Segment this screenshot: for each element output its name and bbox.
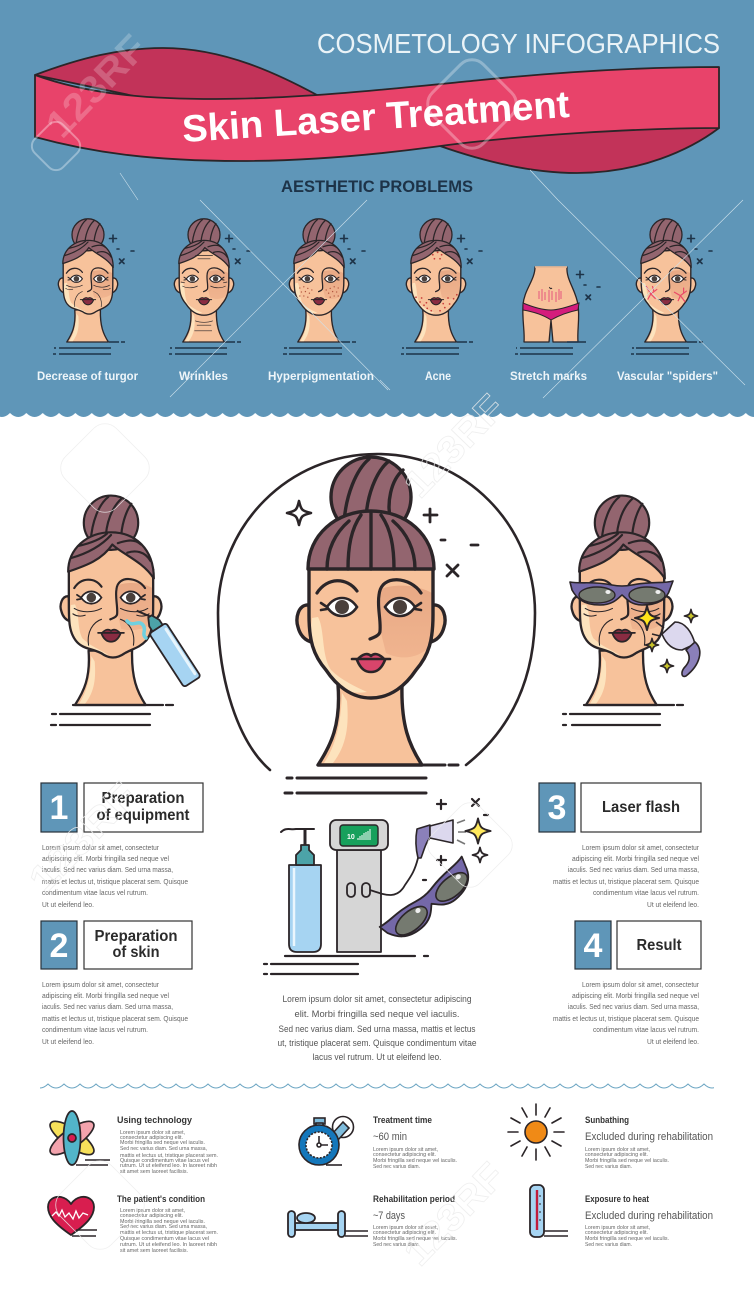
info: sunbathing: Morbi fringilla sed neque vel iaculis. xyxy=(585,1158,669,1164)
info: treatment time: ~60 min xyxy=(373,1131,407,1143)
illustration: equipment xyxy=(264,799,491,974)
step 1: iaculis. Sed nec varius diam. Sed urna massa, xyxy=(42,865,173,874)
illustration: applying gel xyxy=(51,496,201,725)
info: the patient's condition: sit amet sem laoreet facilisis. xyxy=(120,1248,188,1254)
step 4: mattis et lectus ut, tristique placerat sem. Quisque xyxy=(553,1014,699,1023)
info: exposure to heat: Lorem ipsum dolor sit amet, xyxy=(585,1225,650,1231)
icon: laser head xyxy=(652,622,700,676)
info: treatment time: Morbi fringilla sed neque vel iaculis. xyxy=(373,1158,457,1164)
info: exposure to heat: consectetur adipiscing elit. xyxy=(585,1230,648,1236)
info: using technology: sit amet sem laoreet facilisis. xyxy=(120,1169,188,1175)
problem: decrease of turgor: Decrease of turgor xyxy=(37,371,139,383)
info: using technology: Using technology xyxy=(117,1115,192,1125)
ribbon banner xyxy=(35,48,719,173)
step 3: Laser flash xyxy=(602,799,680,816)
info: treatment time: Lorem ipsum dolor sit amet, xyxy=(373,1147,438,1153)
step 1: adipiscing elit. Morbi fringilla sed neque vel xyxy=(42,854,169,863)
problem: stretch marks: Stretch marks xyxy=(510,371,587,383)
info: exposure to heat: Excluded during rehabilitation xyxy=(585,1210,713,1222)
center text block: ut, tristique placerat sem. Quisque condimentum vitae xyxy=(278,1038,476,1049)
step 2 xyxy=(41,921,192,1046)
info: treatment time: Sed nec varius diam. xyxy=(373,1164,420,1170)
watermarks over white area: 123RF xyxy=(396,387,513,506)
info: using technology: Lorem ipsum dolor sit amet, xyxy=(120,1130,185,1136)
icon: cosmetic pump bottle xyxy=(281,829,321,952)
info: sunbathing: Lorem ipsum dolor sit amet, xyxy=(585,1147,650,1153)
step 3: iaculis. Sed nec varius diam. Sed urna massa, xyxy=(568,865,699,874)
info: using technology: Sed nec varius diam. Sed urna massa, xyxy=(120,1146,207,1152)
illustration: main face in circle xyxy=(218,454,535,793)
step 2: iaculis. Sed nec varius diam. Sed urna massa, xyxy=(42,1002,173,1011)
icon: laser machine xyxy=(330,820,418,952)
info: the patient's condition: consectetur adipiscing elit. xyxy=(120,1213,183,1219)
info: sunbathing xyxy=(508,1104,713,1170)
info: exposure to heat: Morbi fringilla sed neque vel iaculis. xyxy=(585,1236,669,1242)
info: the patient's condition: Sed nec varius diam. Sed urna massa, xyxy=(120,1224,207,1230)
info: exposure to heat: Exposure to heat xyxy=(585,1194,649,1204)
step 1: mattis et lectus ut, tristique placerat sem. Quisque xyxy=(42,877,188,886)
info: treatment time: Treatment time xyxy=(373,1115,432,1125)
icon: atom xyxy=(46,1111,98,1165)
icon: laser handpiece xyxy=(416,820,466,858)
step 1: Lorem ipsum dolor sit amet, consectetur xyxy=(42,843,159,852)
step 2: condimentum vitae lacus vel rutrum. xyxy=(42,1025,148,1034)
info: rehabilitation period: ~7 days xyxy=(373,1210,405,1222)
watermarks over white area xyxy=(21,387,518,1274)
step 3: mattis et lectus ut, tristique placerat sem. Quisque xyxy=(553,877,699,886)
watermarks over white area: 123RF xyxy=(21,775,145,901)
step 1: Ut ut eleifend leo. xyxy=(42,900,94,909)
step 4 xyxy=(553,921,701,1046)
step 3: Ut ut eleifend leo. xyxy=(647,900,699,909)
info: treatment time: consectetur adipiscing elit. xyxy=(373,1152,436,1158)
step 4: iaculis. Sed nec varius diam. Sed urna massa, xyxy=(568,1002,699,1011)
center text block: Lorem ipsum dolor sit amet, consectetur adipiscing xyxy=(282,994,472,1005)
step 3: 3 xyxy=(548,789,566,827)
info: the patient's condition: The patient's condition xyxy=(117,1194,205,1204)
problem: wrinkles: Wrinkles xyxy=(179,371,228,383)
problem: decrease of turgor xyxy=(37,219,139,383)
info: exposure to heat: Sed nec varius diam. xyxy=(585,1242,632,1248)
icon: sun xyxy=(508,1104,564,1160)
info: the patient's condition xyxy=(48,1194,218,1254)
step 2: Preparation xyxy=(94,928,178,945)
step 2: Ut ut eleifend leo. xyxy=(42,1037,94,1046)
problem: hyperpigmentation xyxy=(268,219,374,383)
step 4: Result xyxy=(636,937,682,954)
step 3 xyxy=(539,783,701,909)
step 4: Ut ut eleifend leo. xyxy=(647,1037,699,1046)
info: the patient's condition: mattis et lectus ut, tristique placerat sem. xyxy=(120,1230,218,1236)
problem: stretch marks xyxy=(510,267,600,383)
center text block xyxy=(278,994,476,1063)
step 2: of skin xyxy=(112,944,160,961)
info: treatment time xyxy=(299,1115,457,1170)
problem: acne: Acne xyxy=(425,371,451,383)
info: the patient's condition: Quisque condimentum vitae lacus vel xyxy=(120,1236,209,1242)
step 4: adipiscing elit. Morbi fringilla sed neque vel xyxy=(572,991,699,1000)
problem: vascular spiders xyxy=(617,219,718,383)
info: rehabilitation period: Rehabilitation period xyxy=(373,1194,455,1204)
info: sunbathing: Sunbathing xyxy=(585,1115,629,1125)
step 2: mattis et lectus ut, tristique placerat sem. Quisque xyxy=(42,1014,188,1023)
info: rehabilitation period: Lorem ipsum dolor sit amet, xyxy=(373,1225,438,1231)
illustration: laser on face with glasses xyxy=(563,496,700,725)
icon: sunglasses xyxy=(379,857,480,948)
step 2: Lorem ipsum dolor sit amet, consectetur xyxy=(42,980,159,989)
info: sunbathing: Sed nec varius diam. xyxy=(585,1164,632,1170)
title: skin laser treatment: Skin Laser Treatment xyxy=(181,84,571,151)
heading: aesthetic problems: AESTHETIC PROBLEMS xyxy=(281,177,473,196)
problem: hyperpigmentation: Hyperpigmentation xyxy=(268,371,374,383)
step 1: Preparation xyxy=(102,790,184,807)
info: exposure to heat xyxy=(530,1185,713,1248)
step 4: condimentum vitae lacus vel rutrum. xyxy=(593,1025,699,1034)
center text block: lacus vel rutrum. Ut ut eleifend leo. xyxy=(312,1052,442,1063)
icon: thermometer xyxy=(530,1185,544,1237)
center text block: Sed nec varius diam. Sed urna massa, mattis et lectus xyxy=(278,1024,476,1035)
info: rehabilitation period: Sed nec varius diam. xyxy=(373,1242,420,1248)
step 4: Lorem ipsum dolor sit amet, consectetur xyxy=(582,980,699,989)
info: rehabilitation period xyxy=(288,1194,457,1248)
step 1 xyxy=(41,783,203,909)
info: the patient's condition: rutrum. Ut ut eleifend leo. In laoreet nibh xyxy=(120,1242,217,1248)
icon: stopwatch xyxy=(299,1116,354,1165)
icon: sunglasses on face xyxy=(570,581,673,605)
problem: wrinkles xyxy=(169,219,250,383)
info: using technology xyxy=(46,1111,218,1175)
info: sunbathing: consectetur adipiscing elit. xyxy=(585,1152,648,1158)
heading: cosmetology infographics: COSMETOLOGY INFOGRAPHICS xyxy=(317,28,720,59)
info: using technology: Quisque condimentum vitae lacus vel xyxy=(120,1158,209,1164)
step 4: 4 xyxy=(584,927,603,965)
info: using technology: mattis et lectus ut, tristique placerat sem. xyxy=(120,1153,218,1159)
info: the patient's condition: Morbi fringilla sed neque vel iaculis. xyxy=(120,1219,205,1225)
icon: gel bottle xyxy=(135,601,201,687)
step 1: of equipment xyxy=(96,807,190,824)
illustration: equipment: 10 xyxy=(347,834,355,841)
watermarks over blue header xyxy=(28,27,745,398)
info: sunbathing: Excluded during rehabilitation xyxy=(585,1131,713,1143)
step 2: 2 xyxy=(50,927,68,965)
step 3: Lorem ipsum dolor sit amet, consectetur xyxy=(582,843,699,852)
step 1: 1 xyxy=(50,789,68,827)
center text block: elit. Morbi fringilla sed neque vel iaculis. xyxy=(294,1009,460,1020)
step 1: condimentum vitae lacus vel rutrum. xyxy=(42,888,148,897)
step 3: adipiscing elit. Morbi fringilla sed neque vel xyxy=(572,854,699,863)
info: rehabilitation period: consectetur adipiscing elit. xyxy=(373,1230,436,1236)
watermarks over white area: 123RF xyxy=(396,1155,513,1274)
problem: acne xyxy=(401,219,482,383)
info: using technology: consectetur adipiscing elit. xyxy=(120,1135,183,1141)
info: using technology: Morbi fringilla sed neque vel iaculis. xyxy=(120,1140,205,1146)
wavy divider xyxy=(40,1083,714,1092)
info: the patient's condition: Lorem ipsum dolor sit amet, xyxy=(120,1208,185,1214)
info: rehabilitation period: Morbi fringilla sed neque vel iaculis. xyxy=(373,1236,457,1242)
step 3: condimentum vitae lacus vel rutrum. xyxy=(593,888,699,897)
step 2: adipiscing elit. Morbi fringilla sed neque vel xyxy=(42,991,169,1000)
watermarks over blue header: 123RF xyxy=(38,27,155,146)
problem: vascular spiders: Vascular "spiders" xyxy=(617,371,718,383)
icon: bed xyxy=(288,1211,345,1237)
background: blue header xyxy=(0,0,754,422)
scalloped edge xyxy=(0,410,754,422)
icon: heart with pulse xyxy=(48,1197,94,1235)
info: using technology: rutrum. Ut ut eleifend leo. In laoreet nibh xyxy=(120,1163,217,1169)
